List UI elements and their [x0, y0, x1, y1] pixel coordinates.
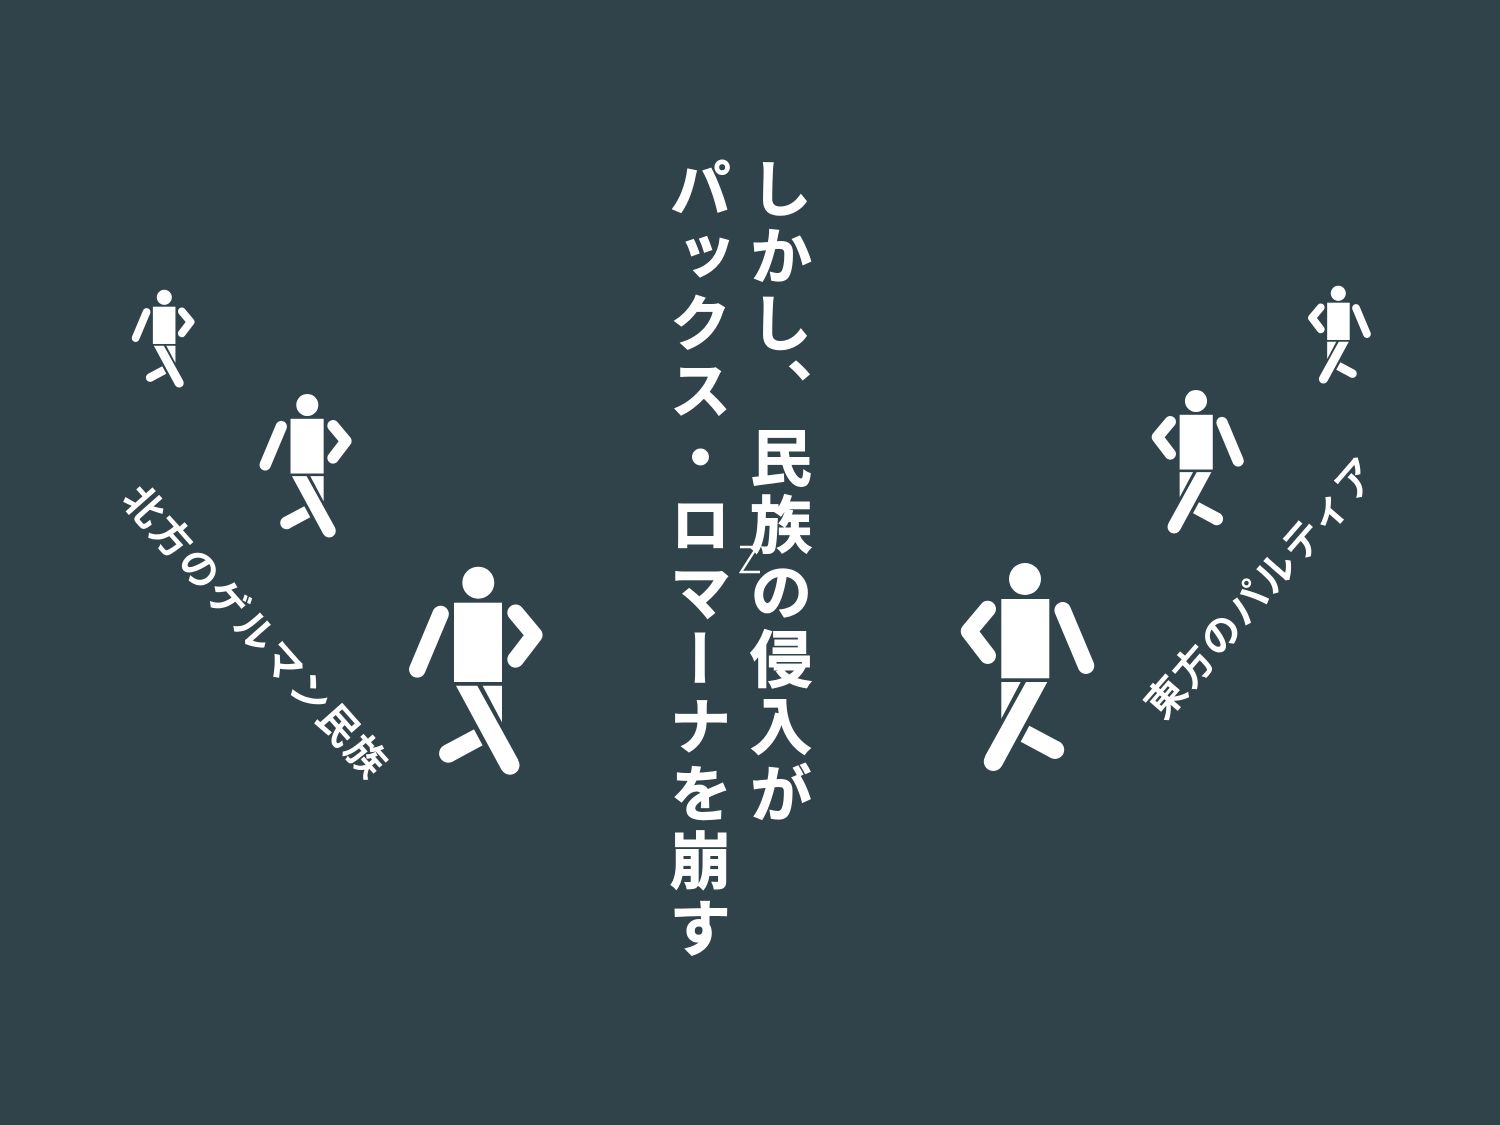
label: eastern Parthia: 東方のパルティア — [1137, 449, 1387, 727]
figure: large left walker — [417, 567, 534, 775]
figure: small left walker — [136, 290, 191, 388]
figure: middle left walker — [265, 394, 346, 537]
title: second column: パックス・ロマーナを崩す — [660, 156, 728, 963]
figure: middle right walker — [1157, 390, 1238, 533]
figure: large right walker — [969, 563, 1086, 771]
label: northern Germanic peoples: 北方のゲルマン民族 — [114, 478, 396, 788]
figure: small right walker — [1312, 286, 1367, 384]
title: first column: しかし、民族の侵入が — [740, 156, 809, 828]
stray Z-shaped mark — [740, 547, 760, 572]
